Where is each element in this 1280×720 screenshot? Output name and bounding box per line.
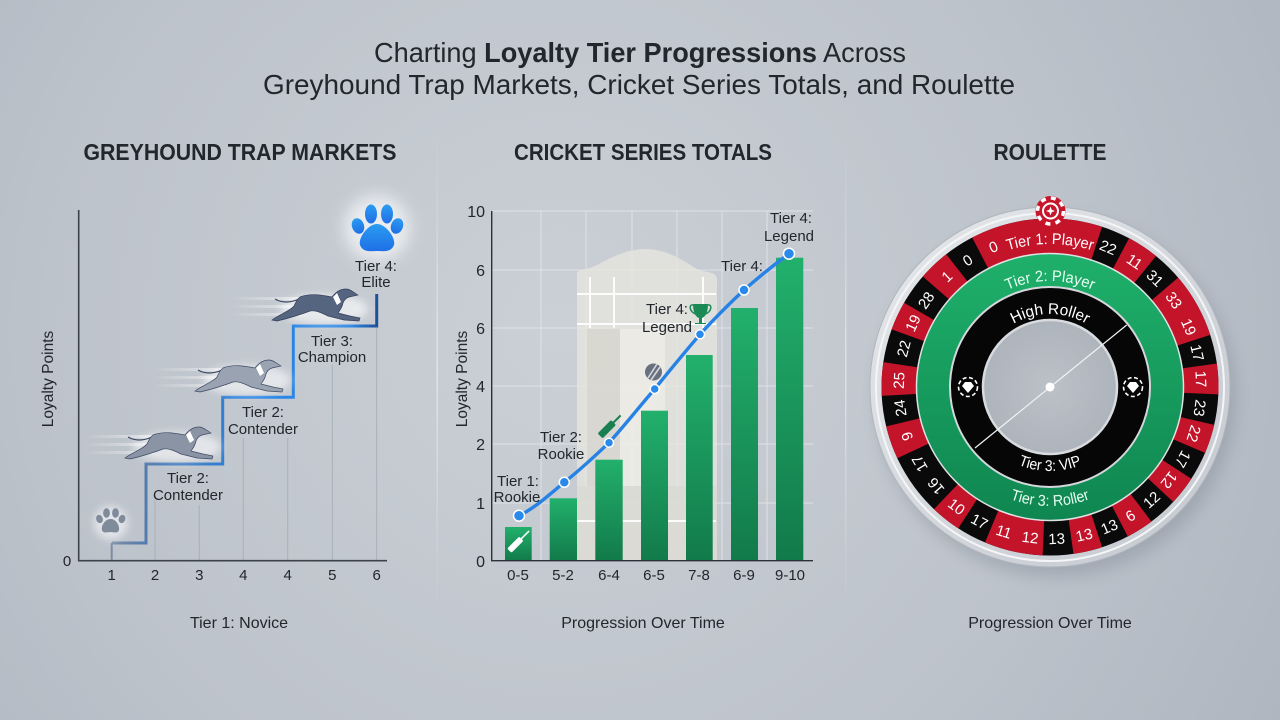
greyhound step chart bbox=[40, 210, 387, 584]
panel: cricket series totals bbox=[454, 139, 814, 632]
pocket numbers: 33 bbox=[1162, 289, 1185, 312]
black ring bbox=[950, 287, 1150, 487]
title: Greyhound Trap Markets, Cricket Series Totals, and Roulette bbox=[263, 69, 1015, 100]
progression line bbox=[514, 248, 794, 521]
pocket numbers: 19 bbox=[1177, 316, 1199, 338]
pocket numbers: 12 bbox=[1021, 529, 1039, 548]
x axis labels: 6-5 bbox=[643, 567, 665, 584]
spindle line bbox=[975, 325, 1127, 448]
cricket grid bbox=[492, 211, 813, 560]
footer: progression cricket: Progression Over Time bbox=[561, 615, 725, 632]
greyhound step chart: 6 bbox=[373, 567, 381, 584]
pocket numbers: 11 bbox=[1123, 251, 1145, 274]
tier labels: greyhound: Elite bbox=[361, 274, 391, 291]
pocket numbers: 17 bbox=[1186, 343, 1207, 363]
tier labels: cricket: Tier 1: bbox=[497, 473, 539, 490]
y axis labels bbox=[467, 204, 485, 571]
greyhound 1 bbox=[83, 427, 221, 462]
pocket numbers: 1 bbox=[939, 268, 956, 286]
pocket numbers: 22 bbox=[894, 339, 915, 359]
tier labels: cricket: Legend bbox=[764, 228, 814, 245]
pocket numbers: 0 bbox=[960, 251, 976, 270]
tier labels: cricket: Tier 4: bbox=[646, 301, 688, 318]
pocket numbers: 13 bbox=[1048, 530, 1065, 548]
x axis labels: 0-5 bbox=[507, 567, 529, 584]
greyhound step chart: 0 bbox=[63, 553, 71, 570]
heading: greyhound: GREYHOUND TRAP MARKETS bbox=[84, 139, 396, 165]
tier labels: greyhound: Contender bbox=[153, 487, 223, 504]
greyhound step chart: 3 bbox=[195, 567, 203, 584]
greyhound step chart: 5 bbox=[328, 567, 336, 584]
title: Charting Loyalty Tier Progressions Across bbox=[374, 37, 906, 68]
y axis labels: 0 bbox=[476, 554, 485, 571]
y axis labels: 10 bbox=[467, 204, 485, 221]
pocket numbers: 17 bbox=[909, 452, 932, 475]
greyhound 2 bbox=[153, 360, 291, 395]
pocket numbers: 23 bbox=[1189, 399, 1209, 417]
greyhound step chart: 4 bbox=[284, 567, 292, 584]
tier labels: greyhound: Tier 4: bbox=[355, 258, 397, 275]
pocket numbers: 13 bbox=[1074, 525, 1094, 546]
pocket numbers: 25 bbox=[891, 372, 908, 389]
pocket numbers: 19 bbox=[902, 312, 925, 335]
icon: cricket ball bbox=[645, 364, 662, 380]
footer: progression roulette: Progression Over Time bbox=[968, 615, 1132, 632]
icon: white bat bbox=[507, 529, 531, 553]
pocket numbers: 10 bbox=[944, 495, 968, 519]
tier labels: cricket: Legend bbox=[642, 319, 692, 336]
y axis labels: 4 bbox=[476, 379, 485, 396]
ring label: tier 2 player: Tier 2: Player bbox=[1004, 270, 1096, 289]
icon: left chip bbox=[958, 378, 978, 396]
heading: cricket: CRICKET SERIES TOTALS bbox=[514, 139, 772, 165]
x axis labels: 6-4 bbox=[598, 567, 620, 584]
icon: green bat bbox=[598, 413, 623, 438]
tier labels: cricket: Tier 4: bbox=[721, 258, 763, 275]
bar chart bbox=[505, 258, 803, 561]
roulette wheel bbox=[870, 207, 1238, 580]
x axis labels: 6-9 bbox=[733, 567, 755, 584]
pocket numbers: 11 bbox=[994, 522, 1014, 543]
icon: small paw bbox=[94, 506, 128, 540]
x axis labels: 7-8 bbox=[688, 567, 710, 584]
pocket numbers: 17 bbox=[1191, 370, 1209, 388]
greyhound step chart: 1 bbox=[108, 567, 116, 584]
pocket numbers: 24 bbox=[891, 399, 911, 417]
tier labels: greyhound: Tier 3: bbox=[311, 333, 353, 350]
icon: large glowing paw bbox=[344, 195, 410, 261]
x axis labels: 9-10 bbox=[775, 567, 805, 584]
tier labels: greyhound: Tier 2: bbox=[242, 404, 284, 421]
pocket numbers: 12 bbox=[1140, 488, 1164, 512]
pocket numbers: 31 bbox=[1143, 267, 1166, 291]
pocket numbers: 9 bbox=[898, 429, 917, 443]
pocket numbers: 22 bbox=[1182, 423, 1204, 444]
pocket numbers: 13 bbox=[1099, 516, 1121, 538]
panel: cricket series totals: Loyalty Points bbox=[454, 331, 471, 427]
center hub bbox=[983, 320, 1117, 454]
pocket numbers bbox=[891, 237, 1209, 548]
icon: red poker chip bbox=[1036, 196, 1066, 226]
footer: tier 1 novice: Tier 1: Novice bbox=[190, 615, 288, 632]
stadium backdrop bbox=[577, 249, 717, 560]
ring label: tier 3 vip: Tier 3: VIP bbox=[1022, 454, 1079, 472]
tier labels: cricket: Rookie bbox=[538, 446, 584, 463]
pocket numbers: 12 bbox=[1157, 468, 1180, 491]
tier labels: greyhound: Contender bbox=[228, 421, 298, 438]
tier labels: cricket: Rookie bbox=[494, 489, 540, 506]
greyhound 3 bbox=[230, 289, 368, 324]
greyhound step chart: Loyalty Points bbox=[40, 331, 57, 427]
panel: roulette bbox=[870, 139, 1238, 632]
tier labels: greyhound: Tier 2: bbox=[167, 470, 209, 487]
ring label: tier 3 roller: Tier 3: Roller bbox=[1013, 489, 1088, 506]
pocket numbers: 17 bbox=[968, 511, 990, 533]
pocket numbers: 0 bbox=[987, 238, 1001, 257]
tier labels: cricket: Tier 4: bbox=[770, 210, 812, 227]
y axis labels: 6 bbox=[476, 321, 485, 338]
heading: roulette: ROULETTE bbox=[994, 139, 1106, 165]
icon: trophy bbox=[690, 304, 711, 324]
pocket numbers: 17 bbox=[1171, 447, 1194, 470]
x axis labels bbox=[507, 567, 805, 584]
green ring bbox=[916, 254, 1184, 520]
tier labels: cricket bbox=[494, 210, 814, 506]
greyhound step chart: 4 bbox=[239, 567, 247, 584]
pocket numbers: 16 bbox=[925, 474, 948, 498]
ring label: high roller: High Roller bbox=[1010, 303, 1090, 324]
panel: greyhound trap markets bbox=[40, 139, 410, 632]
tier labels: greyhound: Champion bbox=[298, 349, 366, 366]
tier labels: greyhound bbox=[153, 258, 397, 504]
icon: right chip bbox=[1124, 378, 1142, 396]
y axis labels: 2 bbox=[476, 437, 485, 454]
title bbox=[263, 37, 1015, 100]
pocket numbers: 22 bbox=[1097, 237, 1119, 259]
tier labels: cricket: Tier 2: bbox=[540, 429, 582, 446]
pocket numbers: 6 bbox=[1123, 507, 1139, 526]
greyhound step chart: 2 bbox=[151, 567, 159, 584]
y axis labels: 6 bbox=[476, 263, 485, 280]
pocket numbers: 28 bbox=[915, 289, 938, 312]
cricket axes bbox=[492, 211, 813, 561]
y axis labels: 1 bbox=[476, 496, 485, 513]
x axis labels: 5-2 bbox=[552, 567, 574, 584]
red pockets bbox=[838, 175, 1262, 599]
ring label: tier 1 player: Tier 1: Player bbox=[1005, 233, 1094, 250]
